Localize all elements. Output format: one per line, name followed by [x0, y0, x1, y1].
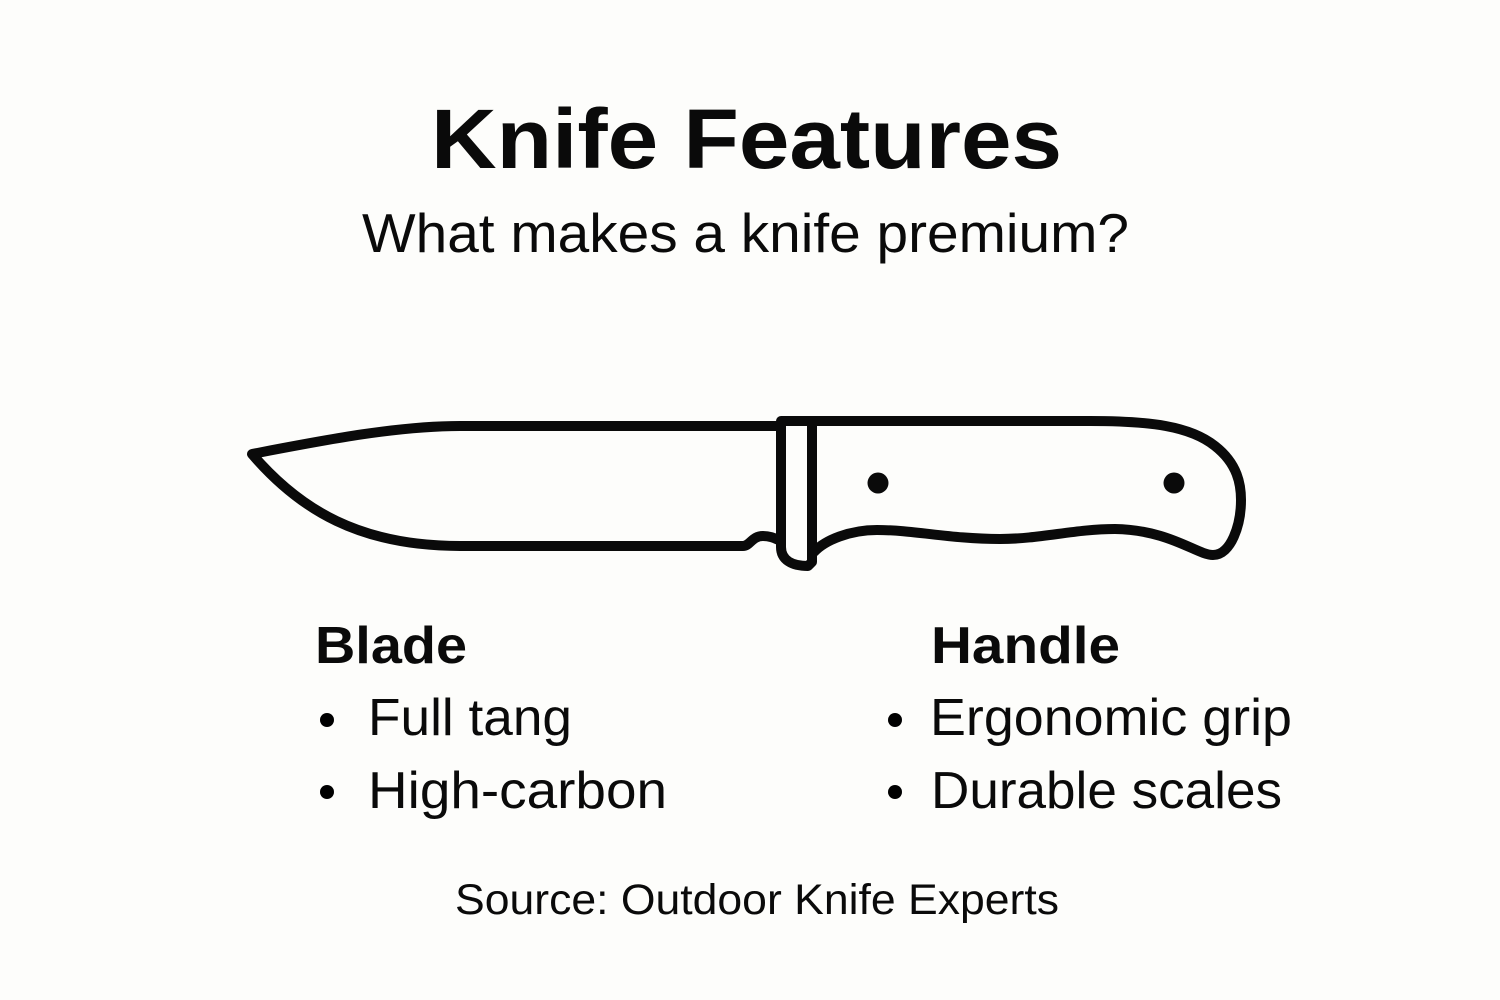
handle item: ergonomic grip: Ergonomic grip — [930, 689, 1292, 747]
blade item: full tang: Full tang — [368, 689, 572, 747]
handle column — [888, 617, 1292, 820]
source note: Source: Outdoor Knife Experts — [455, 876, 1059, 924]
knife guard — [781, 421, 812, 566]
icon: knife — [252, 421, 1241, 566]
blade heading: Blade — [315, 617, 467, 675]
knife blade — [252, 426, 781, 546]
title: Knife Features — [431, 92, 1062, 186]
knife handle — [812, 421, 1241, 555]
blade item: high-carbon: High-carbon — [368, 762, 667, 820]
handle item: durable scales: Durable scales — [931, 762, 1282, 820]
rivet right — [1164, 472, 1184, 494]
rivet left — [868, 472, 888, 494]
subtitle: What makes a knife premium? — [362, 202, 1129, 264]
blade column — [315, 617, 667, 820]
handle heading: Handle — [931, 617, 1120, 675]
